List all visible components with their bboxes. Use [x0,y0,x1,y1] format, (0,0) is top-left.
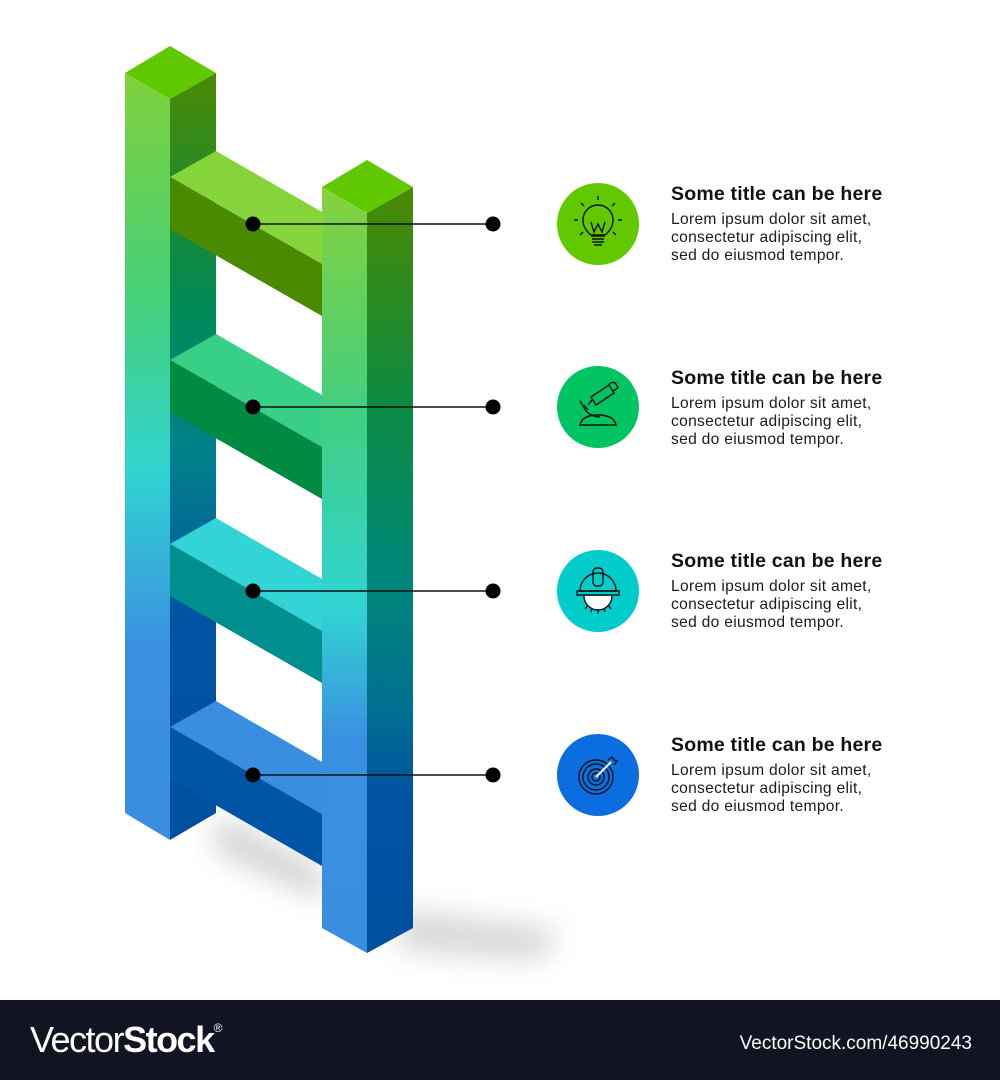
rung 3 [170,518,322,683]
footer logo: VectorStock® [30,1019,221,1060]
left post [125,46,216,840]
rung 4 [170,701,322,866]
text block 2: Lorem ipsum dolor sit amet, [671,395,872,412]
rung 2 [170,334,322,499]
icon: microscope [557,366,639,448]
rung 1 [170,151,322,316]
text block 4: sed do eiusmod tempor. [671,798,844,815]
shadows [216,815,560,960]
text block 3: Lorem ipsum dolor sit amet, [671,578,872,595]
text block 3: consectetur adipiscing elit, [671,596,862,613]
text block 1: consectetur adipiscing elit, [671,229,862,246]
text block 2: Some title can be here [671,367,882,389]
text block 3 [671,550,882,631]
footer bar [0,1000,1000,1080]
text block 4: Lorem ipsum dolor sit amet, [671,762,872,779]
icon: target [557,734,639,816]
text block 3: sed do eiusmod tempor. [671,614,844,631]
text block 4: Some title can be here [671,734,882,756]
text block 4: consectetur adipiscing elit, [671,780,862,797]
text block 4 [671,734,882,815]
text block 2: consectetur adipiscing elit, [671,413,862,430]
text block 1: Some title can be here [671,183,882,205]
text block 2: sed do eiusmod tempor. [671,431,844,448]
text block 1: sed do eiusmod tempor. [671,247,844,264]
connector lines [246,216,500,782]
icon: helmet gear [557,550,639,632]
icon: lightbulb [557,183,639,265]
text block 1 [671,183,882,264]
text block 2 [671,367,882,448]
right post [322,160,413,953]
text block 3: Some title can be here [671,550,882,572]
footer url: VectorStock.com/46990243 [740,1033,972,1054]
text block 1: Lorem ipsum dolor sit amet, [671,211,872,228]
